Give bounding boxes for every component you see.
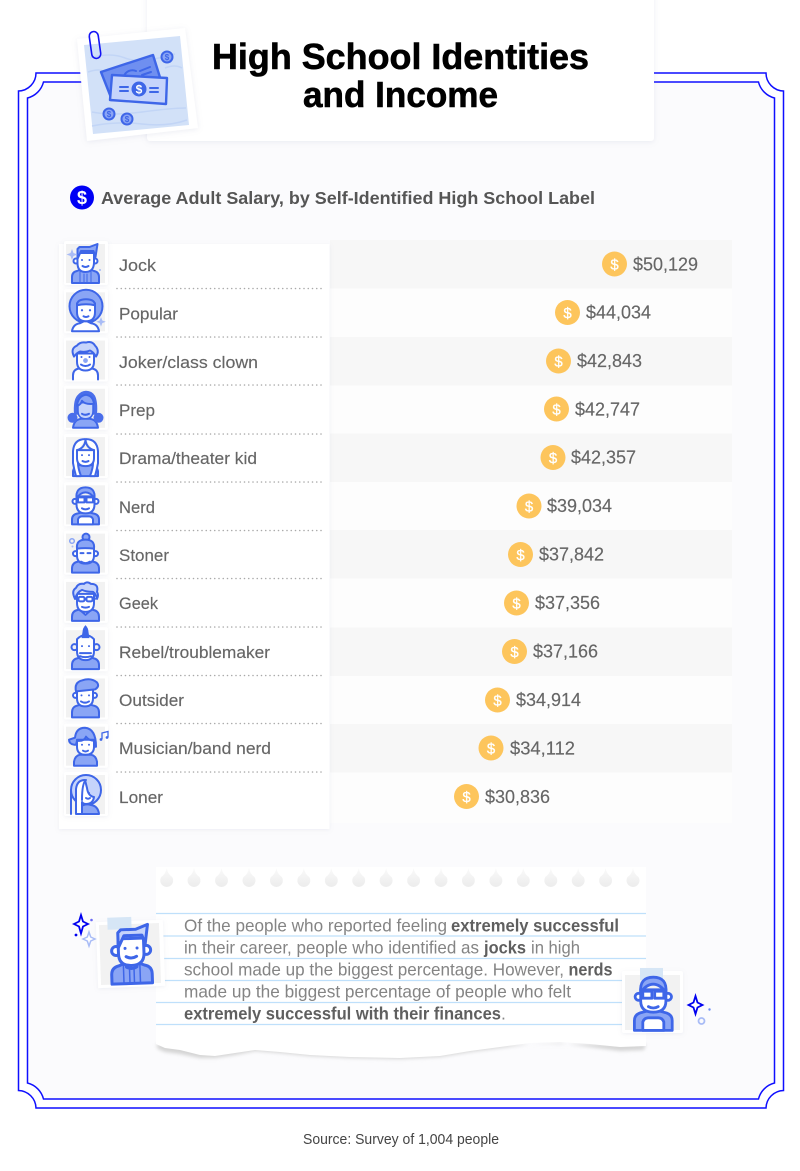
value: Prep: $42,747 [575,400,640,420]
row: Jock: Jock [119,257,157,275]
row: Musician/band nerd [64,724,271,768]
row: Loner [64,772,164,816]
title [212,36,589,115]
value: Loner: $ [462,789,471,806]
chart: salary by label [59,240,732,829]
value: Outsider [485,688,581,712]
value: Stoner [508,542,604,567]
row: Nerd [64,482,155,526]
value: Outsider: $34,914 [516,690,581,710]
icon: pinned money note [77,28,198,141]
text block: callout paragraph: extremely successful with their finances [184,1004,501,1024]
row: Popular: Popular [119,306,179,324]
value: Joker [546,348,642,374]
row: Drama/theater kid: Drama/theater kid [119,450,257,468]
icon: nerd photo card [622,968,683,1033]
value: Stoner: $37,842 [539,544,604,564]
value: Musician [478,736,575,760]
value: Popular: $ [563,305,572,322]
value: Jock [602,252,698,276]
value: Musician: $34,112 [510,738,575,758]
value: Loner [454,784,550,809]
value: Nerd: $ [525,498,534,516]
row: Joker/class clown: Joker/class clown [119,354,258,372]
section heading: $ [77,188,87,208]
row: Rebel/troublemaker: Rebel/troublemaker [119,644,271,662]
row: Jock [64,241,157,285]
value: Nerd: $39,034 [547,496,612,516]
icon: sparkles right [688,996,711,1024]
text block: callout paragraph: in their career, people who identified as [184,938,479,958]
value: Musician: $ [487,740,496,758]
section heading: Average Adult Salary, by Self-Identified High School Label [101,188,595,208]
value: Drama: $42,357 [571,448,636,468]
text block: callout paragraph: in high [531,938,580,958]
icon: pinned money note: $ [125,115,130,124]
row: Outsider: Outsider [119,692,185,710]
value: Rebel: $37,166 [533,642,598,662]
value: Prep: $ [552,402,561,418]
icon: pinned money note: $ [165,53,170,62]
icon: paperclip [89,31,101,59]
title panel [147,0,654,141]
source: Source: Survey of 1,004 people [303,1131,499,1148]
value: Joker: $42,843 [577,351,642,371]
value: Nerd [516,494,612,518]
icon: pinned money note: $ [107,110,112,119]
text block: callout paragraph: made up the biggest percentage of people who felt [184,982,571,1002]
value: Jock: $ [610,256,619,274]
icon: pinned money note: $ [136,82,143,96]
value: Joker: $ [554,354,563,370]
row: Prep: Prep [119,402,155,420]
value: Geek: $ [512,596,521,612]
row: Geek: Geek [119,595,159,613]
text block: callout paragraph: nerds [568,960,613,980]
row: Prep [64,386,155,430]
value: Geek: $37,356 [535,593,600,613]
row: Stoner [64,531,170,575]
row: Musician/band nerd: Musician/band nerd [119,740,271,758]
panel: label list [59,244,330,829]
value: Drama: $ [549,450,558,467]
row: Joker/class clown [64,338,258,382]
row: Popular [64,289,179,333]
text block: callout paragraph: school made up the biggest percentage. However, [184,960,564,980]
text block: callout paragraph: Of the people who reported feeling [184,916,447,936]
value: Geek [504,590,600,616]
value: Prep [544,396,640,422]
row: Loner: Loner [119,789,164,807]
value: Popular: $44,034 [586,302,651,322]
value: Drama [540,445,636,470]
row: Stoner: Stoner [119,547,170,565]
value: Jock: $50,129 [633,254,698,274]
text block: callout paragraph: extremely successful [451,916,619,936]
text block: callout paragraph: jocks [483,938,526,958]
row: Drama/theater kid [64,434,257,478]
row: Geek [64,579,159,623]
text block: callout paragraph: . [501,1004,506,1024]
icon: sparkles left [74,915,95,946]
value: Rebel: $ [510,644,519,661]
panel: torn notebook paper [156,867,646,1059]
row: Nerd: Nerd [119,499,155,517]
icon: jock photo card [96,916,165,988]
row: Outsider [64,676,185,720]
value: Stoner: $ [516,547,525,564]
text block: callout paragraph [184,916,619,1024]
value: Popular [555,300,651,325]
value: Loner: $30,836 [485,787,550,807]
row: Rebel/troublemaker [64,625,271,671]
title: and Income [303,74,498,115]
value: Outsider: $ [493,692,502,710]
title: High School Identities [212,36,589,77]
value: Rebel [502,639,598,664]
